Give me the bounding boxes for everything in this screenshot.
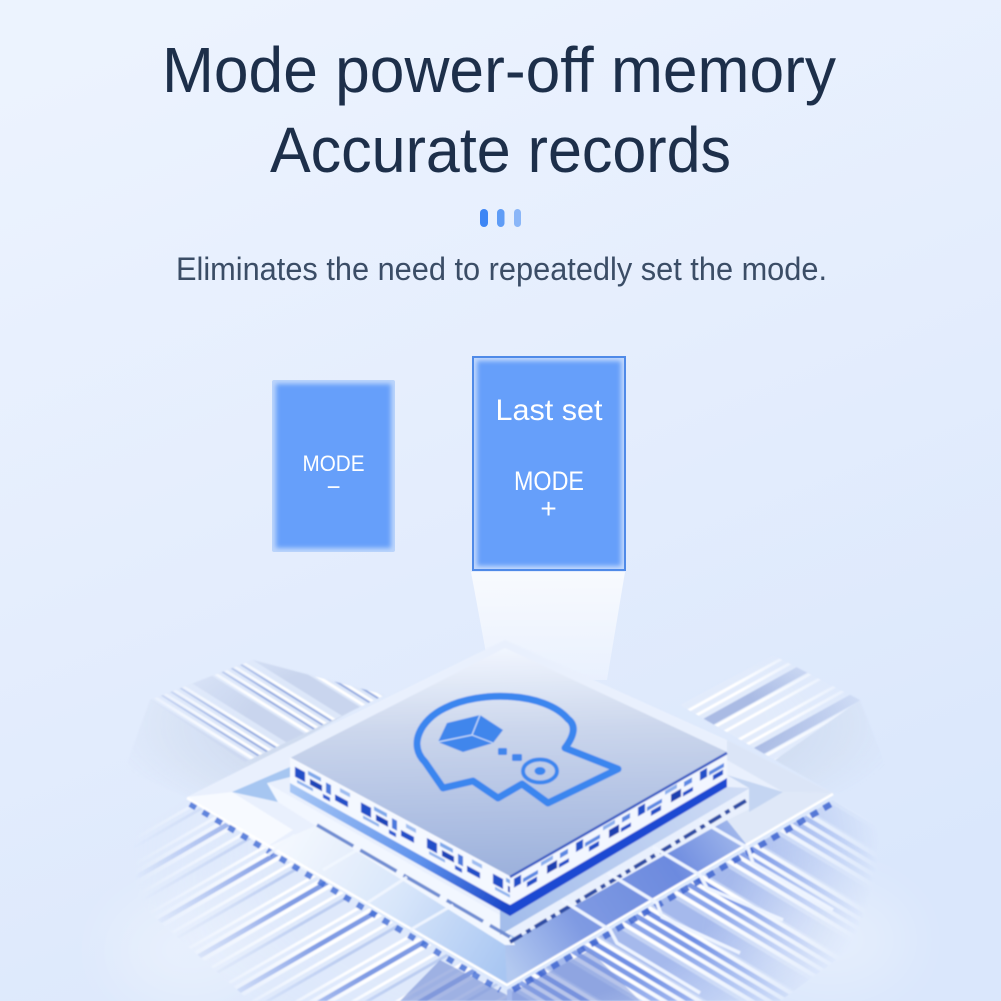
card: MODE minus: MODE [302,451,364,476]
soft fade glow lower right [742,877,866,980]
title: Mode power-off memory [162,34,836,106]
title: Accurate records [270,114,731,186]
lower circuit traces [145,804,867,1001]
decorative three dots [480,209,521,227]
card: MODE minus [272,380,395,552]
card: Last set MODE plus: MODE [514,466,584,496]
base plate [187,640,833,993]
icon: head with cube and target [417,696,618,803]
subtitle: Eliminates the need to repeatedly set the mode. [176,251,827,287]
chip side: right [510,753,727,905]
card: Last set MODE plus [472,356,626,571]
title [162,34,836,186]
card: Last set MODE plus: + [540,493,557,524]
chip illustration [146,651,867,1001]
light beam from chip to card [471,572,625,680]
soft fade glow lower left [160,884,274,992]
chip deep blue underside [290,778,727,916]
card: Last set MODE plus: Last set [496,394,603,427]
upper circuit traces [157,659,859,780]
chip top face [291,682,726,876]
chip side: left [290,758,510,905]
card: MODE minus: − [326,474,341,501]
